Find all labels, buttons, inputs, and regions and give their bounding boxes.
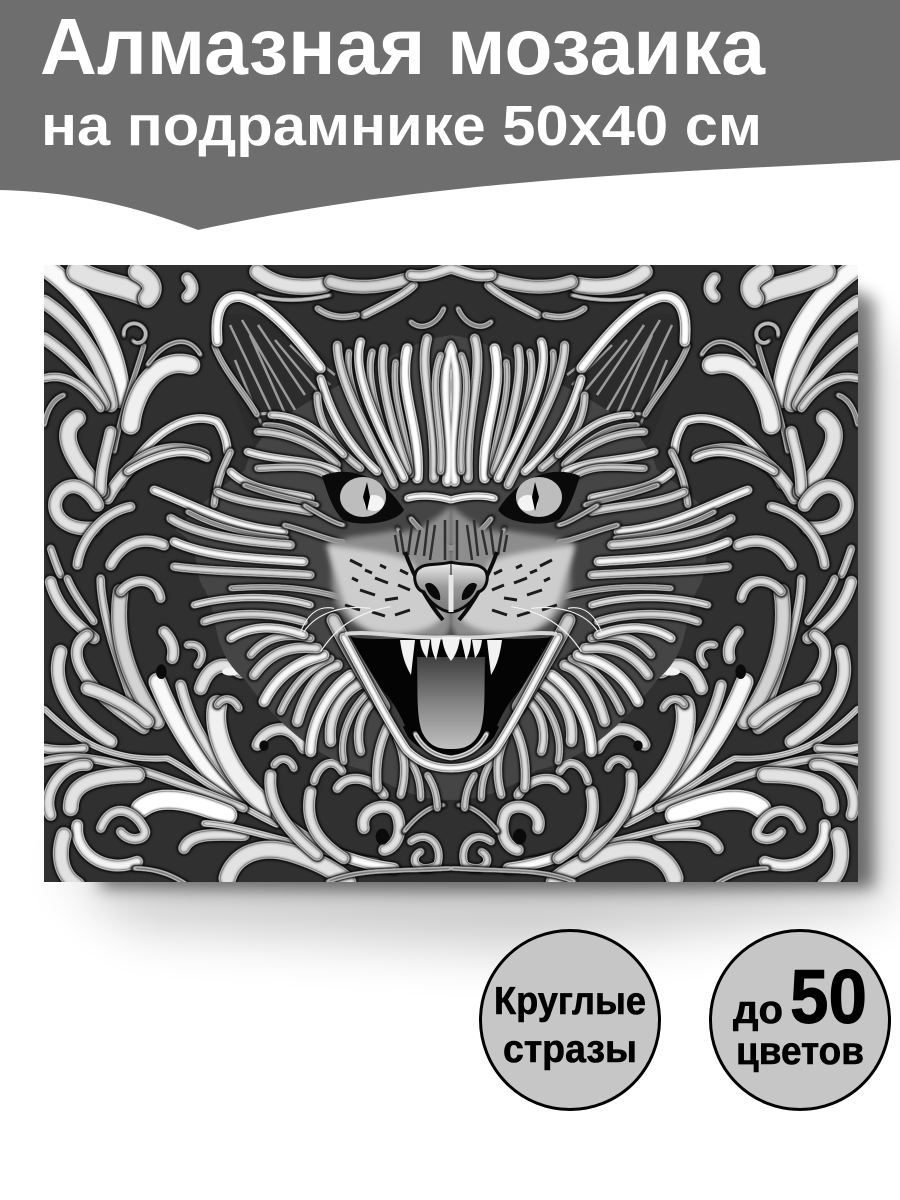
upper ornaments (44, 268, 451, 575)
subtitle: на подрамнике 50х40 см (41, 94, 762, 158)
ear (214, 297, 353, 460)
lower ornaments (44, 578, 451, 885)
mane fur lower (194, 587, 437, 808)
badge: up to 50 colours: 50 (790, 955, 867, 1040)
badge: up to 50 colours (710, 930, 890, 1110)
whiskers (301, 607, 391, 652)
mirrored right half of the artwork (449, 268, 858, 885)
canvas background (44, 265, 858, 882)
artwork: diamond mosaic cat (44, 265, 858, 885)
teeth (400, 637, 452, 675)
tongue (417, 657, 452, 749)
canvas shadow (60, 285, 885, 950)
fur underlay (175, 335, 452, 800)
eye (322, 472, 404, 524)
badge: round rhinestones (480, 930, 660, 1110)
title: Алмазная мозаика (40, 2, 765, 91)
nose (415, 562, 452, 612)
mouth (333, 620, 453, 768)
badge: round rhinestones: Круглые (494, 980, 646, 1023)
badge: round rhinestones: стразы (503, 1028, 637, 1071)
header banner (0, 0, 900, 230)
head fur upper (154, 338, 452, 575)
left half of the artwork (44, 268, 453, 885)
badge: up to 50 colours: до (733, 988, 783, 1032)
muzzle and nose bridge (327, 505, 452, 637)
badge: up to 50 colours: цветов (736, 1030, 864, 1073)
